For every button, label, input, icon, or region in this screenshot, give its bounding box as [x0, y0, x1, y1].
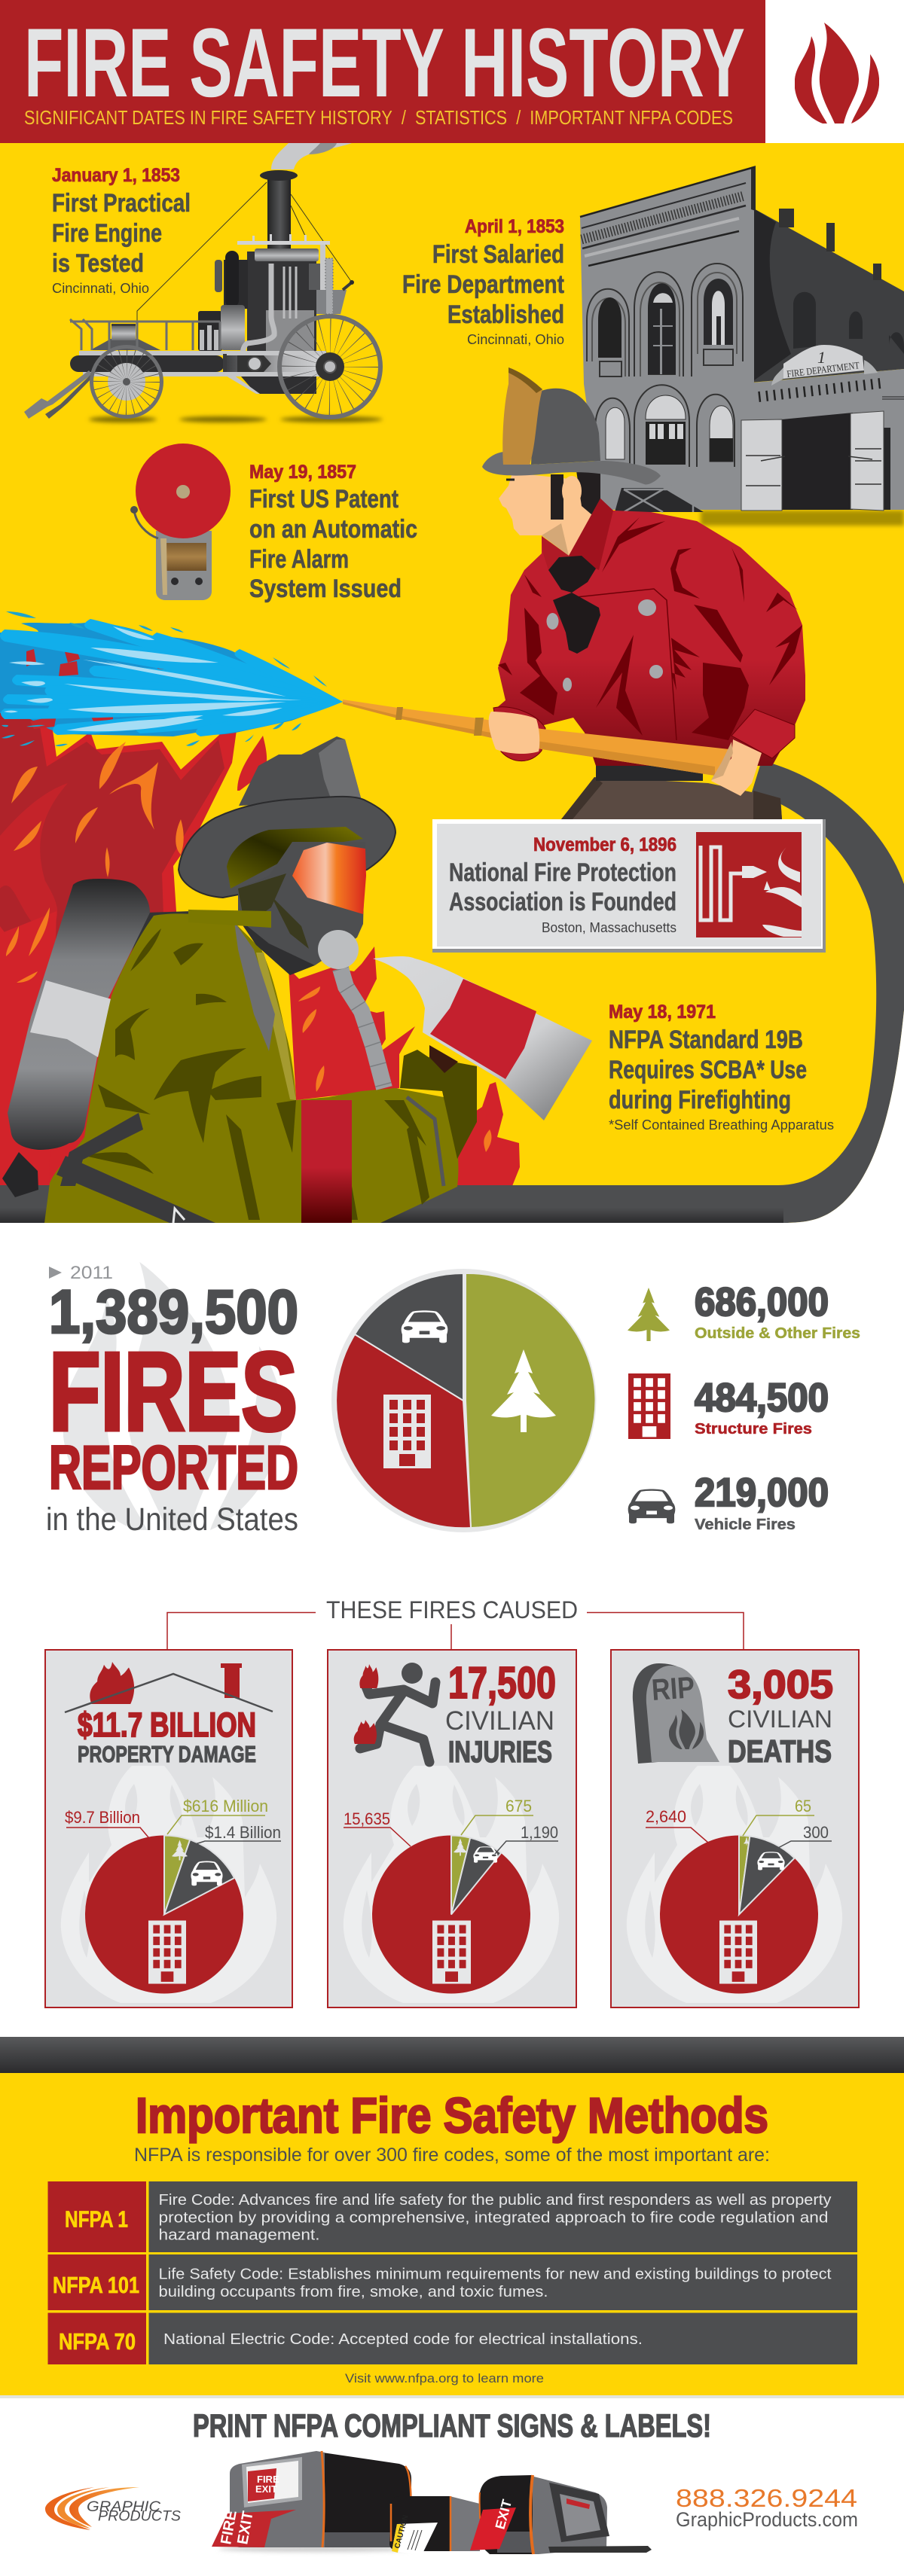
panel: property damage: PROPERTY DAMAGE [78, 1741, 256, 1767]
pie chart: fires by type [331, 1269, 595, 1532]
panel: civilian injuries [328, 1650, 576, 2007]
labels [344, 1797, 558, 1854]
panel: civilian deaths: DEATHS [728, 1733, 832, 1769]
text: first fire engine: is Tested [52, 249, 144, 278]
labels: 65 [795, 1797, 811, 1815]
logo: graphic products: GRAPHIC [87, 2499, 160, 2515]
icon: flame logo [795, 23, 879, 123]
straps [2, 1113, 215, 1223]
white page corner behind hose [783, 1011, 904, 1223]
icon: hose and flames [696, 832, 802, 937]
legend: vehicle fires: 219,000 [695, 1471, 829, 1515]
contact: website: GraphicProducts.com [676, 2508, 858, 2531]
row: NFPA 70: NFPA 70 [59, 2328, 136, 2355]
labels [65, 1797, 281, 1845]
text: first US patent: System Issued [249, 575, 402, 603]
text: first US patent: First US Patent [249, 485, 399, 514]
text: first salaried department: Fire Department [402, 270, 564, 299]
row: NFPA 101: NFPA 101 [53, 2272, 139, 2298]
section: 2011 fires reported [46, 1262, 298, 1538]
row: NFPA 1: NFPA 1 [65, 2206, 128, 2232]
labels: 300 [803, 1823, 829, 1842]
section: fire safety methods [0, 2073, 904, 2398]
printer: small: CAUTION [393, 2514, 411, 2550]
logo: graphic products [45, 2487, 181, 2530]
printer: touch screen [470, 2475, 652, 2554]
icon: burning house [65, 1662, 273, 1712]
text: first US patent: on an Automatic [249, 515, 417, 544]
icon: tombstone [633, 1663, 719, 1764]
sign: NFPA founded: Boston, Massachusetts [542, 920, 676, 935]
panel: civilian deaths: 3,005 [728, 1663, 833, 1707]
subtitle: SIGNIFICANT DATES IN FIRE SAFETY HISTORY / STATISTICS / IMPORTANT NFPA CODES [24, 106, 733, 129]
sign: NFPA founded: National Fire Protection [449, 858, 676, 887]
background flame [344, 1766, 559, 2003]
printer: touch screen: EXIT [493, 2498, 515, 2531]
row: NFPA 101: Life Safety Code: Establishes minimum requirements for new and existing buildings to protect [158, 2265, 832, 2283]
oxygen tank [8, 879, 150, 1150]
contact: phone: 888.326.9244 [676, 2484, 857, 2512]
sign: NFPA founded: Association is Founded [449, 888, 676, 916]
labels: 1,190 [521, 1823, 558, 1842]
pie: property damage [85, 1836, 243, 1994]
panel: civilian injuries: INJURIES [448, 1736, 552, 1769]
flames behind firefighter [0, 648, 520, 1186]
heading: these fires caused: THESE FIRES CAUSED [326, 1596, 578, 1623]
panel: civilian deaths [611, 1650, 859, 2007]
pie: injuries [372, 1836, 530, 1994]
heading: print signs: PRINT NFPA COMPLIANT SIGNS & LABELS! [193, 2408, 711, 2444]
sign: NFPA founded: November 6, 1896 [533, 834, 676, 855]
text: first fire engine: First Practical [52, 189, 191, 218]
word: fires: FIRES [49, 1330, 298, 1454]
fire hose [0, 761, 904, 1223]
panel: property damage [45, 1650, 292, 2007]
footnote: Visit www.nfpa.org to learn more [345, 2371, 544, 2385]
row: NFPA 1: protection by providing a comprehensive, integrated approach to fire code regulation and [158, 2209, 829, 2226]
text: first salaried department: Established [447, 300, 564, 329]
row: NFPA 70 [48, 2313, 857, 2364]
text: NFPA standard 19B [609, 1001, 834, 1133]
fireman with red shirt [493, 471, 805, 819]
text: first fire engine: January 1, 1853 [52, 165, 180, 186]
icon: fire alarm bell [130, 444, 231, 600]
sign: NFPA founded [432, 819, 826, 953]
icon: fire engine [24, 143, 383, 422]
labels: $1.4 Billion [205, 1823, 281, 1842]
row: NFPA 1: hazard management. [158, 2226, 319, 2244]
sign text: number one: 1 [817, 348, 826, 367]
heading: Important Fire Safety Methods [136, 2087, 768, 2143]
printer: large: EXIT [255, 2483, 277, 2495]
labels: 15,635 [344, 1809, 390, 1828]
year: 2011 [70, 1263, 113, 1283]
text: first salaried department: April 1, 1853 [465, 216, 564, 237]
text: first fire engine [52, 165, 191, 296]
text: NFPA standard 19B: Requires SCBA* Use [609, 1056, 807, 1084]
text: first salaried department [402, 216, 564, 347]
modern firefighter with axe [2, 736, 592, 1223]
icon: background flame [63, 1262, 282, 1530]
text: first US patent [249, 462, 417, 603]
text: first salaried department: Cincinnati, Ohio [467, 332, 564, 347]
glove [400, 1050, 477, 1159]
labels: 675 [505, 1797, 532, 1815]
row: NFPA 1 [48, 2181, 857, 2252]
text: first salaried department: First Salaried [432, 240, 564, 269]
text: first fire engine: Cincinnati, Ohio [52, 281, 149, 296]
dark separator bar [0, 2037, 904, 2073]
printer: large: FIRE [218, 2509, 240, 2546]
row: NFPA 101: building occupants from fire, smoke, and toxic fumes. [158, 2283, 548, 2300]
respirator mask [188, 842, 384, 1088]
text: NFPA standard 19B: *Self Contained Breathing Apparatus [609, 1117, 834, 1133]
legend: outside fires [628, 1280, 860, 1342]
sign text: fire department: FIRE DEPARTMENT [786, 359, 860, 380]
icon: tombstone: RIP [651, 1671, 695, 1707]
text: first fire engine: Fire Engine [52, 219, 162, 248]
word: reported: REPORTED [49, 1434, 298, 1502]
panel: civilian deaths: CIVILIAN [728, 1706, 832, 1733]
icon: burning runner [354, 1663, 435, 1762]
legend: outside fires: Outside & Other Fires [695, 1325, 860, 1342]
icon: fire station building [580, 166, 904, 526]
printer: large: EXIT [234, 2510, 257, 2546]
text: NFPA standard 19B: May 18, 1971 [609, 1001, 716, 1023]
helmet: modern [179, 736, 396, 898]
legend: vehicle fires [628, 1471, 829, 1533]
legend: structure fires: 484,500 [695, 1376, 829, 1420]
background flame [627, 1766, 842, 2003]
logo: graphic products: PRODUCTS [98, 2509, 181, 2524]
labels: 2,640 [646, 1807, 686, 1826]
legend: vehicle fires: Vehicle Fires [695, 1517, 796, 1533]
water spray [0, 611, 343, 746]
printers [212, 2451, 652, 2555]
text: first US patent: Fire Alarm [249, 545, 349, 574]
axe head [373, 956, 592, 1120]
helmet: fireman [482, 367, 661, 484]
text: NFPA standard 19B: NFPA Standard 19B [609, 1026, 803, 1054]
header band [0, 0, 765, 143]
legend: structure fires [628, 1373, 829, 1439]
pie: deaths [660, 1836, 818, 1994]
year [49, 1263, 113, 1283]
row: NFPA 70: National Electric Code: Accepted code for electrical installations. [163, 2331, 643, 2348]
background flame [61, 1766, 276, 2003]
intro: NFPA is responsible for over 300 fire codes, some of the most important are: [134, 2145, 770, 2166]
labels: $616 Million [183, 1797, 268, 1815]
caption: in the United States [46, 1501, 298, 1538]
text: NFPA standard 19B: during Firefighting [609, 1086, 791, 1114]
connector lines [167, 1613, 744, 1650]
panel: civilian injuries: 17,500 [448, 1658, 556, 1708]
panel: civilian injuries: CIVILIAN [445, 1706, 554, 1736]
labels [646, 1797, 832, 1848]
printer: large [212, 2451, 414, 2552]
panel: property damage: $11.7 BILLION [78, 1706, 256, 1744]
legend: outside fires: 686,000 [695, 1280, 829, 1325]
row: NFPA 101 [48, 2254, 857, 2310]
printer: small [389, 2496, 480, 2555]
text: first US patent: May 19, 1857 [249, 462, 356, 483]
history panel yellow background [0, 143, 904, 1223]
total fires: 1,389,500 [49, 1278, 298, 1346]
row: NFPA 1: Fire Code: Advances fire and life safety for the public and first responders as well as property [158, 2191, 832, 2209]
nozzle and hands [343, 700, 762, 796]
labels: $9.7 Billion [65, 1808, 140, 1827]
legend: structure fires: Structure Fires [695, 1421, 812, 1437]
printer: large: FIRE [257, 2474, 279, 2485]
